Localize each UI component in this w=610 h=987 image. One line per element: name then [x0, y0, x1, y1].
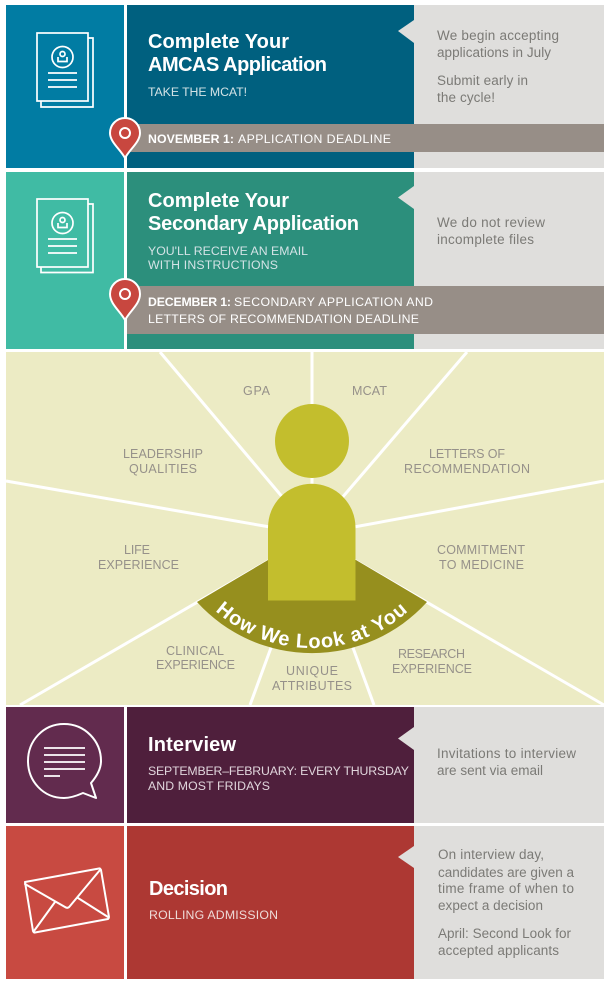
text: email instructions [148, 244, 308, 272]
text: take the MCAT: TAKE THE MCAT! [148, 85, 247, 99]
label: commitment to medicine: TO MEDICINE [439, 558, 524, 572]
label: letters of recommendation: LETTERS OF [429, 447, 505, 461]
callout: accepting applications: the cycle! [437, 90, 495, 105]
icon: secondary documents [37, 199, 93, 272]
label: leadership qualities: LEADERSHIP [123, 447, 203, 461]
deadline band: December 1: SECONDARY APPLICATION AND [234, 295, 433, 309]
callout: accepting applications: applications in July [437, 45, 551, 60]
text: interview dates: SEPTEMBER–FEBRUARY: EVERY THURSDAY [148, 764, 409, 778]
deadline band: December 1: DECEMBER 1: [148, 295, 231, 309]
panel: AMCAS application [6, 5, 604, 168]
text: email instructions: YOU'LL RECEIVE AN EMAIL [148, 244, 308, 258]
callout: accepting applications: We begin accepting [437, 28, 559, 43]
heading: complete secondary: Secondary Application [148, 213, 359, 235]
deadline band: December 1 [127, 286, 604, 334]
label: life experience [98, 543, 179, 572]
label: life experience: EXPERIENCE [98, 558, 179, 572]
text: interview dates [148, 764, 409, 793]
heading: decision: Decision [149, 878, 228, 900]
curved title: How We Look at You [216, 601, 408, 648]
deadline band: December 1: LETTERS OF RECOMMENDATION DEADLINE [148, 312, 419, 326]
fan banner [197, 560, 427, 653]
label: clinical experience [156, 644, 235, 672]
heading: complete secondary: Complete Your [148, 190, 289, 212]
label: commitment to medicine: COMMITMENT [437, 543, 525, 557]
label: research experience: RESEARCH [398, 647, 465, 661]
text: rolling admission: ROLLING ADMISSION [149, 908, 278, 922]
callout: decision timing: time frame of when to [438, 881, 574, 896]
callout: decision timing: On interview day, [438, 847, 544, 862]
heading: complete AMCAS: AMCAS Application [148, 54, 327, 76]
label: research experience: EXPERIENCE [392, 662, 472, 676]
text: email instructions: WITH INSTRUCTIONS [148, 258, 278, 272]
deadline band: November 1: APPLICATION DEADLINE [238, 132, 391, 146]
heading: complete secondary [148, 190, 359, 235]
label: unique attributes: UNIQUE [286, 664, 338, 678]
panel: secondary application [6, 172, 604, 349]
panel: how we look at you [6, 352, 604, 705]
heading: complete AMCAS [148, 31, 327, 76]
label: commitment to medicine [437, 543, 525, 572]
callout: incomplete files: incomplete files [437, 232, 534, 247]
callout: decision timing [398, 846, 574, 958]
label: research experience [392, 647, 472, 676]
label: clinical experience: EXPERIENCE [156, 658, 235, 672]
callout: accepting applications: Submit early in [437, 73, 528, 88]
callout: incomplete files: We do not review [437, 215, 545, 230]
label: MCAT: MCAT [352, 384, 387, 398]
callout: decision timing: candidates are given a [438, 865, 574, 880]
icon: pin November [110, 118, 140, 158]
label: leadership qualities [123, 447, 203, 476]
label: leadership qualities: QUALITIES [129, 462, 197, 476]
label: GPA: GPA [243, 384, 271, 398]
icon: application documents [37, 33, 93, 107]
callout: accepting applications [398, 20, 559, 105]
callout: invitations: are sent via email [437, 763, 543, 778]
panel: interview [6, 707, 604, 823]
icon: envelope [25, 868, 109, 933]
callout: decision timing: April: Second Look for [438, 926, 572, 941]
heading: complete AMCAS: Complete Your [148, 31, 289, 53]
deadline band: November 1: NOVEMBER 1: [148, 132, 234, 146]
label: life experience: LIFE [124, 543, 150, 557]
callout: invitations: Invitations to interview [437, 746, 576, 761]
panel: decision [6, 826, 604, 979]
callout: invitations [398, 727, 576, 778]
label: clinical experience: CLINICAL [166, 644, 224, 658]
person figure [268, 404, 356, 600]
callout: decision timing: accepted applicants [438, 943, 559, 958]
callout: decision timing: expect a decision [438, 898, 543, 913]
icon: speech bubble [28, 724, 101, 798]
callout: incomplete files [398, 186, 545, 247]
label: letters of recommendation [404, 447, 530, 476]
text: interview dates: AND MOST FRIDAYS [148, 779, 270, 793]
label: letters of recommendation: RECOMMENDATION [404, 462, 530, 476]
heading: interview: Interview [148, 734, 236, 756]
label: unique attributes: ATTRIBUTES [272, 679, 352, 693]
label: unique attributes [272, 664, 352, 693]
deadline band: November 1 [127, 124, 604, 152]
icon: pin December [110, 279, 140, 320]
